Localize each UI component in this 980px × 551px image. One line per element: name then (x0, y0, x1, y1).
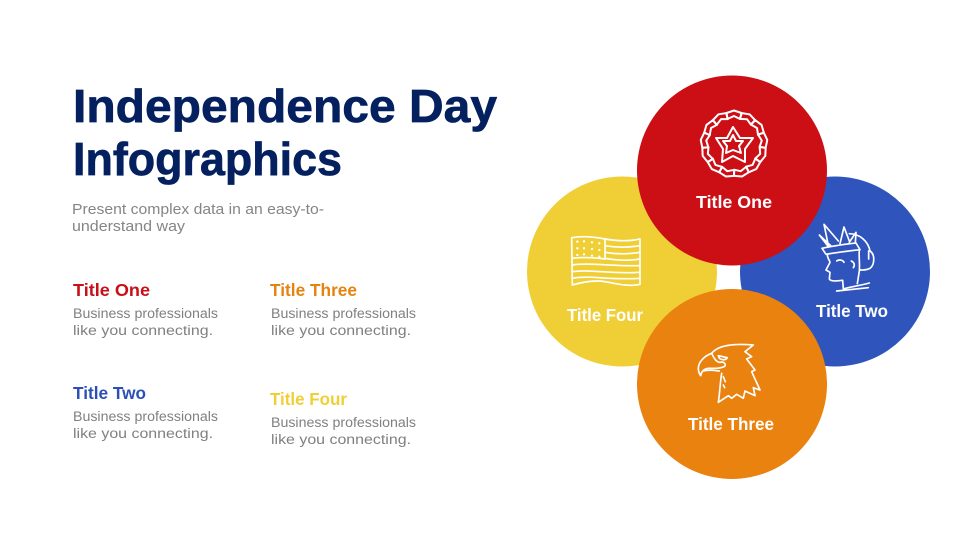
text block: title four (270, 389, 416, 447)
icon: statue of liberty head (819, 224, 874, 291)
text block: title three: like you connecting. (271, 323, 411, 338)
icon: star medal (700, 110, 768, 178)
circle: title one (637, 76, 827, 266)
text block: title two: Title Two (73, 383, 146, 403)
label: title three: Title Three (688, 414, 774, 434)
title: Infographics (73, 133, 342, 185)
title (73, 80, 497, 185)
circle: title three (637, 289, 827, 479)
subtitle: understand way (72, 219, 186, 235)
text block: title two (73, 383, 218, 441)
subtitle: Present complex data in an easy-to- (72, 202, 324, 218)
label: title four: Title Four (567, 305, 643, 325)
text block: title three: Business professionals (271, 306, 416, 321)
text block: title four: Business professionals (271, 415, 416, 430)
text block: title four: Title Four (270, 389, 347, 409)
title: Independence Day (73, 80, 497, 132)
text block: title four: like you connecting. (271, 432, 411, 447)
text block: title three (270, 280, 416, 338)
label: title two: Title Two (816, 301, 888, 321)
text block: title three: Title Three (270, 280, 357, 300)
circle: title two (740, 176, 930, 366)
text block: title one: like you connecting. (73, 323, 213, 338)
circle: title four (527, 176, 717, 366)
text block: title one: Title One (73, 280, 150, 300)
icon: eagle head (698, 344, 760, 402)
text block: title one: Business professionals (73, 306, 218, 321)
label: title one: Title One (696, 192, 772, 212)
text block: title two: like you connecting. (73, 426, 213, 441)
subtitle (72, 202, 324, 235)
text block: title one (73, 280, 218, 338)
icon: american flag (572, 237, 640, 285)
text block: title two: Business professionals (73, 409, 218, 424)
